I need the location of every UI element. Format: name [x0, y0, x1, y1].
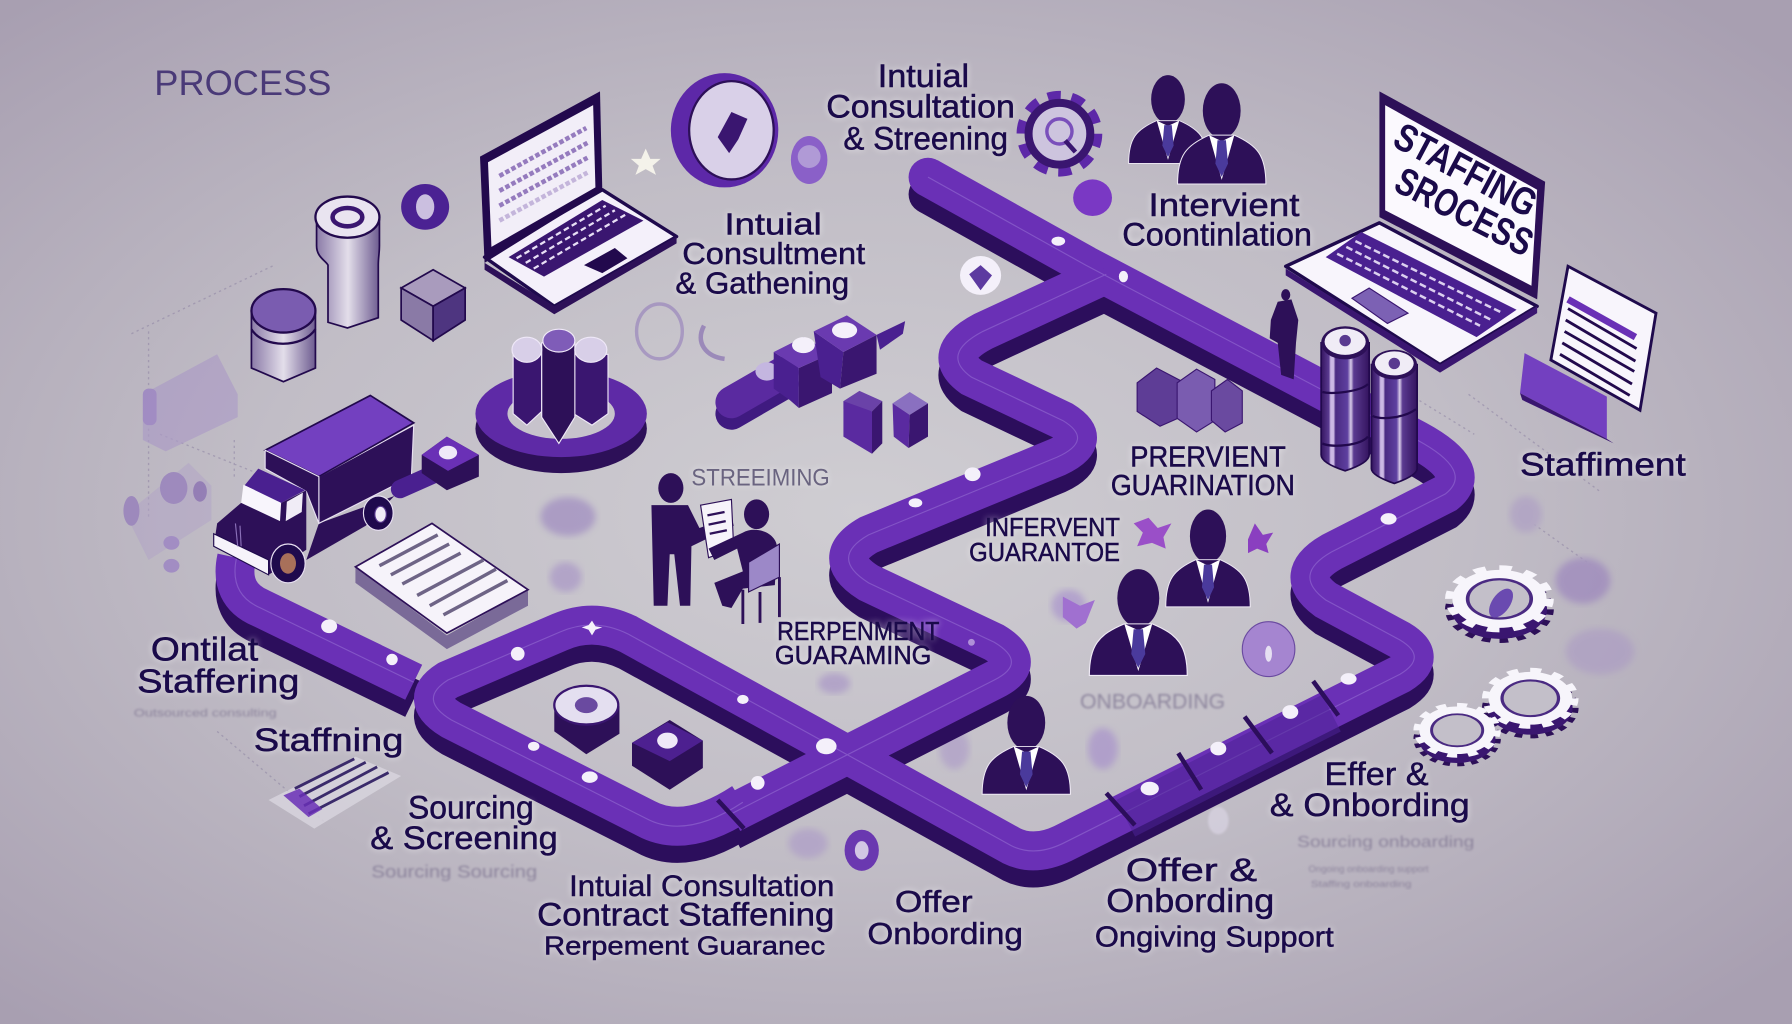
icon: lightbulb badge	[960, 256, 1001, 295]
label: initial consultment and gathering	[675, 206, 866, 301]
icon: paper stack	[355, 523, 528, 649]
label: staffiment: Staffiment	[1520, 446, 1686, 482]
icon: settings gear	[1023, 97, 1096, 170]
laptop screen title: SROCESS	[1388, 159, 1540, 265]
icon: right laptop	[1286, 91, 1545, 373]
icon: left laptop	[480, 91, 677, 314]
label: streeming: STREEIMING	[691, 465, 830, 492]
icon: left cylinders and box	[251, 184, 465, 382]
icon: server stack	[1137, 368, 1242, 432]
icon: two managers	[1129, 75, 1266, 184]
icon: tall batteries	[1321, 326, 1417, 483]
label: sourcing and screening: Sourcing	[408, 789, 534, 825]
label: sourcing and screening	[370, 789, 558, 856]
label: blurred staffing note: Outsourced consulting	[134, 708, 277, 720]
icon: small mask badge	[791, 136, 827, 184]
label: effer and onbording: & Onbording	[1270, 787, 1470, 823]
label: initial consultation and screening: Intuial	[878, 58, 969, 94]
icon: small purple sphere	[1073, 179, 1112, 216]
label: blurred onboarding notes	[1297, 834, 1474, 889]
label: offer onbording ongoing support	[1095, 852, 1334, 953]
label: initial consultment and gathering: Intuial	[725, 206, 822, 241]
icon: clock disc	[671, 73, 778, 187]
label: prervient guarination	[1111, 441, 1295, 502]
icon: star	[631, 149, 661, 175]
icon: candidates	[982, 510, 1250, 794]
icon: standing figure	[1270, 289, 1298, 379]
road waypoint markers	[321, 237, 1397, 795]
label: reprenment guaraming: GUARAMING	[775, 640, 931, 670]
label: initial consultation contract staffening	[537, 870, 834, 960]
icon: road node behind truck	[400, 437, 479, 490]
label: prervient guarination: PRERVIENT	[1130, 441, 1286, 473]
label: blurred onboarding notes: Staffing onboarding	[1311, 879, 1411, 889]
icon: blocks on short road	[731, 315, 928, 454]
icon: document and folder	[1520, 266, 1656, 443]
label: initial consultation and screening	[826, 58, 1015, 157]
label: prervient guarination: GUARINATION	[1111, 470, 1295, 502]
label: infervent guarantoe: GUARANTOE	[969, 537, 1120, 567]
label: offer onbording	[867, 884, 1023, 951]
label: interview coordination: Coontinlation	[1122, 217, 1312, 253]
label: interview coordination	[1122, 187, 1312, 253]
icon: delivery truck	[214, 395, 414, 583]
label: reprenment guaraming	[775, 616, 939, 670]
label: initial consultation contract staffening: Rerpement Guaranec	[544, 930, 825, 960]
icon: form sheet	[269, 757, 401, 829]
icon: loop cubes	[554, 686, 703, 790]
label: offer onbording ongoing support: Onbording	[1106, 883, 1274, 920]
label: initial consultment and gathering: Consultment	[682, 236, 866, 271]
label: ontilat staffering: Ontilat	[151, 632, 258, 669]
label: initial consultation contract staffening: Intuial Consultation	[569, 870, 834, 903]
label: ontilat staffering	[137, 632, 299, 701]
label: initial consultment and gathering: & Gathening	[675, 266, 849, 301]
label: infervent guarantoe: INFERVENT	[985, 512, 1120, 542]
label: offer onbording: Offer	[895, 884, 973, 919]
label: staffning: Staffning	[254, 722, 403, 758]
title: PROCESS	[154, 63, 331, 103]
label: blurred onboarding notes: Sourcing onboarding	[1297, 834, 1474, 851]
label: initial consultation and screening: & Streening	[843, 121, 1008, 157]
label: initial consultation and screening: Consultation	[826, 89, 1015, 125]
label: infervent guarantoe	[969, 512, 1120, 567]
label: interview coordination: Intervient	[1149, 187, 1300, 223]
faint background sketches	[123, 265, 1634, 858]
label: ontilat staffering: Staffering	[137, 664, 299, 701]
label: onboarding faint: ONBOARDING	[1080, 689, 1225, 714]
label: offer onbording ongoing support: Offer &	[1126, 852, 1257, 888]
label: effer and onbording: Effer &	[1325, 756, 1429, 792]
icon: purple stars	[1063, 518, 1273, 629]
label: initial consultation contract staffening: Contract Staffening	[537, 897, 834, 933]
label: offer onbording: Onbording	[867, 916, 1023, 951]
icon: small round seal	[845, 830, 879, 871]
label: blurred onboarding notes: Ongoing onboarding support	[1309, 864, 1429, 874]
icon: ring with pillars	[475, 329, 647, 473]
label: offer onbording ongoing support: Ongiving Support	[1095, 921, 1334, 953]
label: effer and onbording	[1270, 756, 1470, 823]
icon: consultation meeting	[651, 473, 779, 624]
icon: gears	[1417, 569, 1575, 764]
label: reprenment guaraming: RERPENMENT	[777, 616, 939, 646]
laptop screen title: STAFFING	[1387, 115, 1544, 226]
icon: round badge	[1242, 622, 1295, 677]
process road	[235, 158, 1455, 868]
label: blurred sourcing note: Sourcing Sourcing	[371, 862, 537, 882]
label: sourcing and screening: & Screening	[370, 820, 558, 856]
